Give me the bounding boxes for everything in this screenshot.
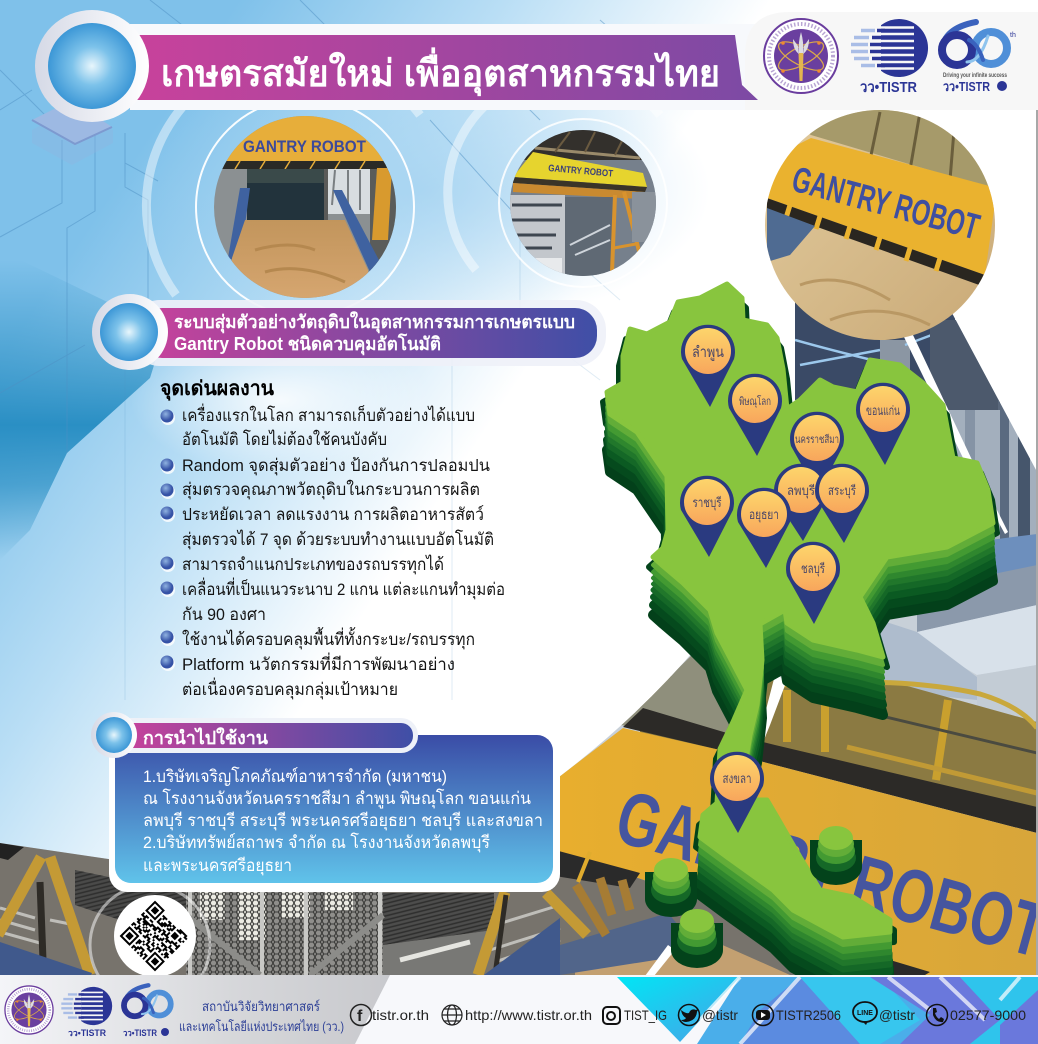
footer logo: 60th: วว•TISTR	[123, 1028, 157, 1038]
pin: Ratchaburi: ราชบุรี	[692, 495, 722, 511]
icon: facebook	[350, 1004, 372, 1026]
top white strip	[130, 12, 1038, 110]
pin: Phitsanulok	[728, 374, 782, 456]
applications text: 1.บริษัทเจริญโภคภัณฑ์อาหารจำกัด (มหาชน)	[143, 766, 447, 786]
QR code	[90, 885, 210, 1005]
icon: instagram	[603, 1007, 620, 1024]
photo: gantry robot hall	[510, 130, 658, 278]
pin: Lamphun	[681, 325, 735, 407]
lower left steel platform	[0, 843, 587, 978]
photo: gantry robot close-up	[765, 108, 997, 342]
decorative rings behind photos	[146, 53, 667, 316]
highlights list: ประหยัดเวลา ลดแรงงาน การผลิตอาหารสัตว์	[182, 505, 484, 524]
decorative stacked squares	[32, 100, 113, 165]
logo: TISTR emblem	[763, 18, 839, 94]
applications text: ณ โรงงานจังหวัดนครราชสีมา ลำพูน พิษณุโลก ขอนแก่น	[143, 788, 531, 809]
highlights list: เคลื่อนที่เป็นแนวระนาบ 2 แกน แต่ละแกนทำมุมต่อ	[182, 577, 505, 600]
logo: 60th anniversary: วว•TISTR	[943, 79, 990, 94]
contact row: TISTR2506	[776, 1007, 841, 1023]
highlights list: สุ่มตรวจได้ 7 จุด ด้วยระบบทำงานแบบอัตโนมัติ	[182, 529, 494, 550]
photo: gantry robot hall: GANTRY ROBOT	[548, 163, 614, 180]
pin: Chonburi: ชลบุรี	[801, 561, 825, 577]
pin: Khon Kaen: ขอนแก่น	[866, 403, 900, 418]
highlights list: ต่อเนื่องครอบคลุมกลุ่มเป้าหมาย	[182, 677, 398, 700]
logo: TISTR mark: วว•TISTR	[860, 79, 917, 96]
dark blue wedge at left	[0, 250, 165, 560]
header text: Gantry Robot ชนิดควบคุมอัตโนมัติ	[174, 333, 441, 356]
factory roofs and walls	[880, 534, 1036, 700]
beam yellow face	[555, 728, 1037, 975]
organisation name: และเทคโนโลยีแห่งประเทศไทย (วว.)	[179, 1019, 344, 1034]
logo: 60th anniversary: th	[1010, 32, 1016, 39]
title text: เกษตรสมัยใหม่ เพื่ออุตสาหกรรมไทย	[161, 47, 720, 97]
applications text: ลพบุรี ราชบุรี สระบุรี พระนครศรีอยุธยา ชลบุรี และสงขลา	[143, 811, 543, 831]
pin: Ayutthaya	[737, 488, 791, 568]
photo: gantry robot bay: GANTRY ROBOT	[243, 137, 367, 156]
header text	[174, 311, 575, 356]
brown gantry frame	[620, 650, 1037, 815]
contact row: 02577-9000	[950, 1007, 1026, 1023]
pin: Saraburi	[815, 464, 869, 543]
highlights list: กัน 90 องศา	[182, 605, 266, 624]
icon: twitter	[678, 1004, 700, 1026]
highlights list: อัตโนมัติ โดยไม่ต้องใช้คนบังคับ	[182, 429, 387, 449]
Thailand map with extrusion	[603, 284, 997, 995]
pin: Lopburi	[774, 464, 828, 541]
beam black strip	[623, 708, 1037, 833]
highlights list: สุ่มตรวจคุณภาพวัตถุดิบในกระบวนการผลิต	[182, 479, 480, 500]
highlights list: Random จุดสุ่มตัวอย่าง ป้องกันการปลอมปน	[182, 456, 490, 476]
circuit line background pattern	[0, 0, 680, 700]
highlights list: เครื่องแรกในโลก สามารถเก็บตัวอย่างได้แบบ	[182, 403, 475, 425]
pin: Chonburi	[786, 542, 840, 624]
highlights list	[182, 403, 505, 700]
header text: ระบบสุ่มตัวอย่างวัตถุดิบในอุตสาหกรรมการเกษตรแบบ	[174, 311, 575, 334]
section header: applications	[91, 712, 418, 758]
pin: Lopburi: ลพบุรี	[787, 483, 815, 499]
pin: Nakhon Ratchasima: นครราชสีมา	[795, 433, 839, 446]
contact row: tistr.or.th	[372, 1007, 429, 1023]
white swoosh bands	[645, 335, 1008, 976]
island: west	[645, 858, 697, 917]
title orb	[35, 10, 149, 122]
bullet markers	[160, 410, 175, 671]
title banner	[130, 35, 758, 100]
icon: facebook: f	[357, 1008, 363, 1025]
icon: phone	[926, 1004, 948, 1026]
big factory and gantry photo backdrop	[0, 290, 1038, 980]
contact row: @tistr	[879, 1007, 915, 1023]
pin: Songkhla: สงขลา	[722, 771, 752, 786]
pin: Lamphun: ลำพูน	[692, 344, 724, 361]
icon: line	[853, 1002, 877, 1025]
contact row: http://www.tistr.or.th	[465, 1007, 592, 1023]
highlights list: Platform นวัตกรรมที่มีการพัฒนาอย่าง	[182, 652, 455, 674]
icon: youtube	[752, 1004, 774, 1026]
pin: Phitsanulok: พิษณุโลก	[739, 394, 771, 408]
heading: highlights: จุดเด่นผลงาน	[160, 378, 274, 401]
island: upper	[810, 826, 862, 885]
factory steelwork	[795, 300, 1037, 545]
pin: Songkhla	[710, 752, 764, 833]
applications text: 2.บริษัททรัพย์สถาพร จำกัด ณ โรงงานจังหวัดลพบุรี	[143, 832, 490, 853]
background soft glows	[130, 50, 710, 475]
contact row	[350, 1002, 1026, 1026]
organisation name: สถาบันวิจัยวิทยาศาสตร์	[202, 999, 320, 1014]
footer logo: emblem	[4, 985, 54, 1035]
logo: 60th anniversary	[942, 22, 1016, 94]
pin: Saraburi: สระบุรี	[828, 483, 856, 499]
icon: line: LINE	[857, 1010, 873, 1017]
pin: Ayutthaya: อยุธยา	[749, 507, 779, 523]
beam underside	[555, 850, 930, 975]
photo: gantry robot bay	[214, 116, 398, 300]
footer logo: TISTR	[61, 987, 112, 1038]
footer logo: 60th	[123, 985, 171, 1038]
footer logo: TISTR: วว•TISTR	[68, 1028, 106, 1038]
highlights list: ใช้งานได้ครอบคลุมพื้นที่ทั้งกระบะ/รถบรรทุก	[182, 627, 475, 650]
panel: applications	[109, 728, 560, 892]
pin: Nakhon Ratchasima	[790, 412, 844, 494]
footer geometric pattern	[617, 977, 1038, 1044]
footer bar	[0, 975, 1038, 1044]
right edge line	[1036, 108, 1038, 975]
highlights list: สามารถจำแนกประเภทของรถบรรทุกได้	[182, 554, 444, 575]
contact row: @tistr	[702, 1007, 738, 1023]
pin: Khon Kaen	[856, 383, 910, 465]
applications text	[143, 766, 543, 876]
organisation name	[179, 999, 344, 1034]
island: south	[671, 909, 723, 968]
pin: Ratchaburi	[680, 476, 734, 557]
logo: TISTR mark	[851, 19, 928, 96]
contact row: TIST_IG	[624, 1007, 667, 1023]
applications heading text: การนำไปใช้งาน	[143, 727, 269, 748]
applications text: และพระนครศรีอยุธยา	[143, 856, 292, 876]
logo: 60th anniversary: Driving your infinite success	[943, 73, 1008, 79]
section header: system title	[92, 294, 606, 370]
icon: globe	[442, 1005, 462, 1025]
